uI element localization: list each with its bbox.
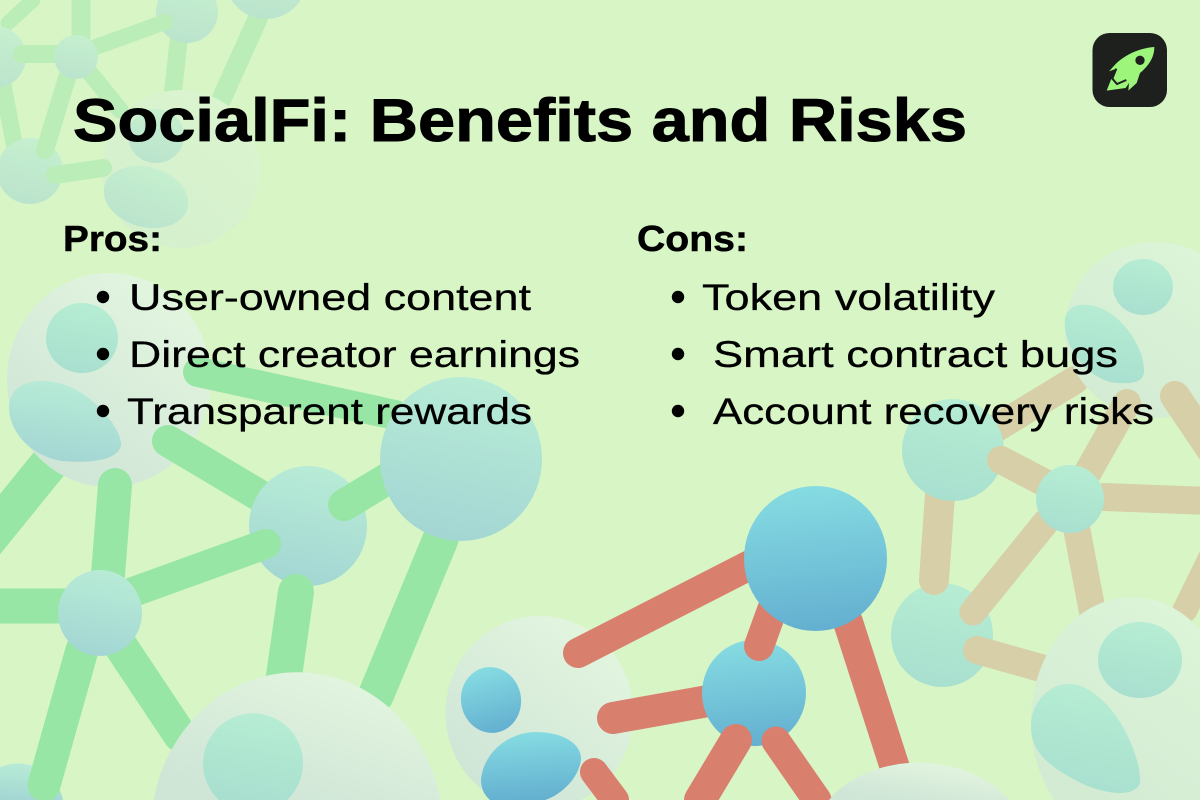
pros list: Transparent rewards <box>127 391 532 432</box>
faded molecule network: top left <box>0 0 307 248</box>
tan molecule network: right <box>891 242 1200 800</box>
cons heading: Cons: <box>637 218 748 259</box>
cons list: Smart contract bugs <box>713 334 1118 375</box>
cons list: Account recovery risks <box>713 391 1154 432</box>
rocket <box>1107 47 1154 91</box>
cons list <box>672 277 1154 432</box>
red and blue molecule network: bottom centre <box>446 486 1009 800</box>
green molecule network: lower left <box>0 273 542 800</box>
pros list: User-owned content <box>129 277 532 318</box>
pros list <box>97 277 580 432</box>
pros heading: Pros: <box>63 218 162 259</box>
panel: cons <box>637 218 1154 432</box>
cons list: Token volatility <box>702 277 996 318</box>
title: SocialFi: Benefits and Risks <box>73 87 967 154</box>
panel: pros <box>63 218 580 432</box>
pros list: Direct creator earnings <box>129 334 580 375</box>
icon: rocket logo <box>1092 33 1167 107</box>
